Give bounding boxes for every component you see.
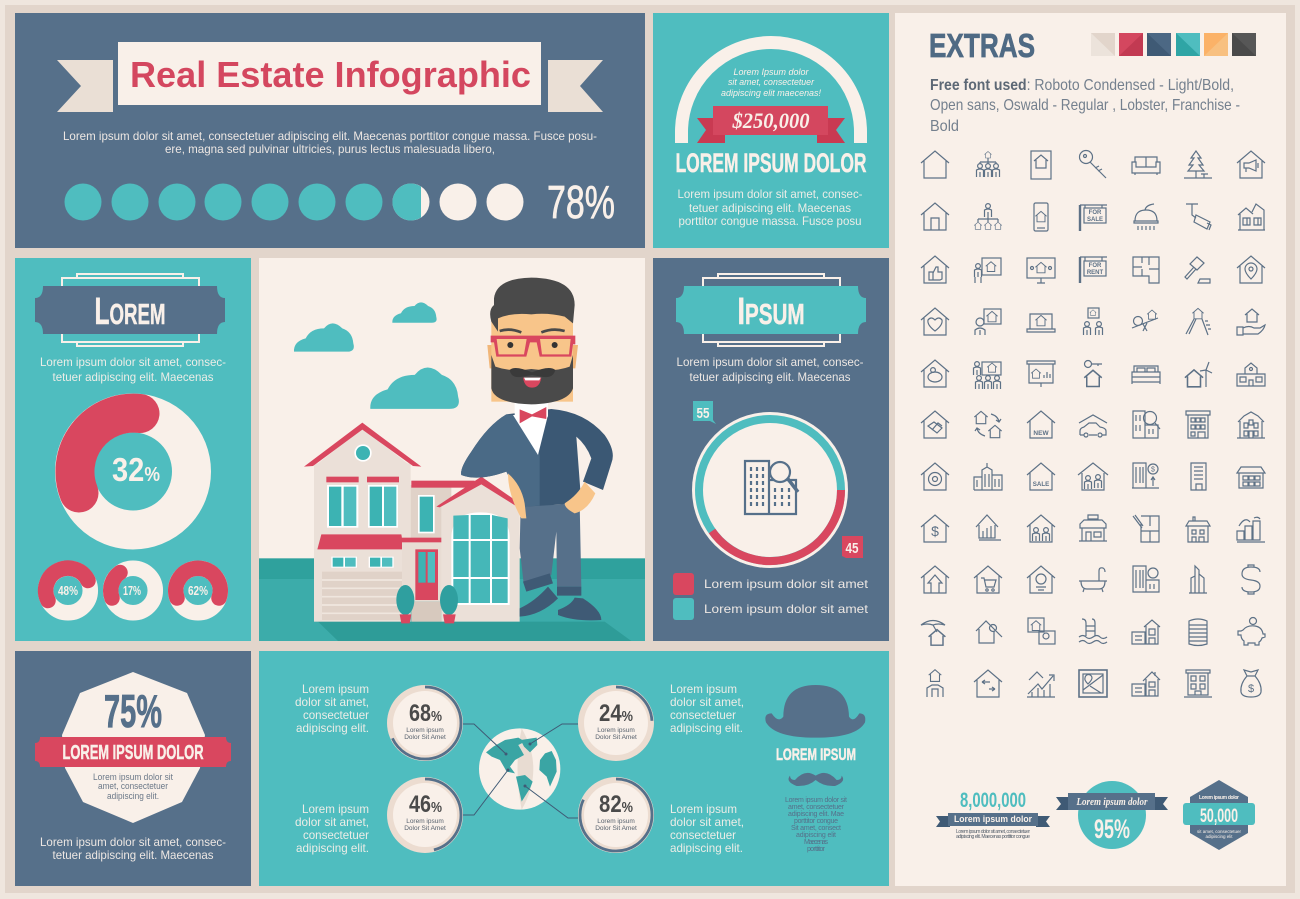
text: tetuer adipiscing elit. Maecenas bbox=[690, 370, 850, 384]
icon: city bbox=[974, 463, 1002, 490]
colour swatches bbox=[1091, 33, 1256, 56]
price ribbon bbox=[697, 106, 845, 143]
glasses bbox=[491, 336, 575, 357]
icon: house bbox=[921, 151, 949, 178]
icon: couple in house bbox=[1027, 515, 1055, 542]
icon: house megaphone bbox=[1237, 151, 1265, 178]
icon: for sale sign: FOR bbox=[1089, 210, 1102, 216]
icon: couple house bbox=[1084, 308, 1102, 335]
icon: house piggy bbox=[921, 360, 949, 387]
icon: key house bbox=[1084, 360, 1102, 386]
icon: house handshake bbox=[921, 411, 949, 438]
icon grid bbox=[921, 150, 1265, 697]
icon: round tower bbox=[1189, 619, 1207, 646]
icon: laptop bbox=[1027, 314, 1055, 332]
icon: shop bbox=[1079, 515, 1107, 541]
tag 55 bbox=[693, 401, 716, 424]
icon: house dollar bbox=[921, 515, 949, 542]
stat circle 68: Lorem ipsum bbox=[406, 727, 444, 734]
text top right: dolor sit amet, bbox=[670, 695, 744, 709]
icon: house chart bbox=[976, 515, 1001, 540]
percent 78: 78% bbox=[547, 176, 615, 228]
icon: family house bbox=[1078, 463, 1108, 490]
icon: property growth chart bbox=[1237, 517, 1265, 542]
icon: bathtub bbox=[1079, 568, 1107, 592]
hat text: porttitor bbox=[807, 846, 826, 853]
stat circle 68: Dolor Sit Amet bbox=[404, 734, 446, 741]
badge ribbon label: Lorem ipsum dolor bbox=[1076, 796, 1148, 808]
legend bbox=[673, 573, 869, 620]
price text: porttitor congue massa. Fusce posu bbox=[678, 214, 862, 228]
icon: house insurance umbrella bbox=[921, 620, 945, 645]
title: Real Estate Infographic bbox=[130, 54, 531, 95]
text bottom left: consectetuer bbox=[303, 828, 369, 842]
intro text: Lorem ipsum dolor sit amet, consectetuer adipiscing elit. Maecenas porttitor congue massa. Fusce posu- bbox=[63, 129, 597, 143]
icon: building value up: $ bbox=[1151, 466, 1155, 474]
text: Lorem ipsum dolor sit amet, consec- bbox=[40, 355, 226, 369]
icon: dollar bbox=[1242, 565, 1260, 594]
stat circle 46: Lorem ipsum bbox=[406, 818, 444, 825]
icon: building search bbox=[745, 461, 798, 514]
icon: for rent sign: FOR bbox=[1089, 263, 1102, 269]
hair bbox=[490, 278, 575, 332]
badge: 95% bbox=[1056, 781, 1168, 849]
text bbox=[676, 355, 864, 384]
arch caption: sit amet, consectetuer bbox=[728, 77, 815, 88]
text top left: consectetuer bbox=[303, 708, 369, 722]
icon: chat house money bbox=[1028, 618, 1055, 644]
tag 45 bbox=[842, 536, 863, 558]
small donut 48 bbox=[46, 568, 90, 613]
stat circle 82 bbox=[578, 777, 654, 853]
moustache bbox=[510, 368, 555, 377]
badge text: adipiscing elit. bbox=[107, 791, 159, 801]
badge caption bbox=[956, 829, 1030, 840]
badge: 50,000 bbox=[1183, 780, 1255, 850]
icon: playground bbox=[1186, 308, 1211, 335]
big donut chart bbox=[74, 413, 192, 530]
stat circle 68 bbox=[387, 685, 463, 761]
icon: building dollar bbox=[1133, 566, 1159, 592]
badge ribbon bbox=[1056, 797, 1168, 810]
icon: house dollar: $ bbox=[931, 523, 939, 539]
badge caption: Lorem ipsum dolor sit amet, consectetuer bbox=[956, 829, 1030, 835]
small donut 17: 17% bbox=[123, 583, 141, 598]
text bottom left: dolor sit amet, bbox=[295, 815, 369, 829]
stat circle 24: 24% bbox=[599, 700, 633, 727]
donut value: 32% bbox=[112, 451, 160, 488]
hat text: Lorem ipsum dolor sit bbox=[785, 797, 847, 804]
icon: for rent sign bbox=[1080, 257, 1107, 283]
text bottom right: adipiscing elit. bbox=[670, 841, 743, 855]
bow tie bbox=[520, 407, 546, 423]
polygon badge bbox=[62, 672, 205, 823]
icon: floor plan bbox=[1133, 257, 1159, 283]
price text bbox=[678, 187, 863, 228]
text bottom left: adipiscing elit. bbox=[296, 841, 369, 855]
panel: price bbox=[653, 13, 889, 248]
text bottom left bbox=[295, 802, 369, 855]
icon: house document bbox=[1027, 566, 1055, 593]
badge: 8,000,000 bbox=[936, 789, 1050, 840]
plaque label: LOREM IPSUM DOLOR bbox=[62, 742, 204, 764]
icon: house heart bbox=[921, 308, 949, 335]
text bottom right: Lorem ipsum bbox=[670, 802, 737, 816]
legend: Lorem ipsum dolor sit amet bbox=[704, 602, 869, 616]
icon: office block bbox=[1184, 670, 1212, 697]
text: tetuer adipiscing elit. Maecenas bbox=[52, 370, 214, 384]
badge caption bottom: sit amet, consectetuer bbox=[1197, 829, 1242, 834]
panel: title banner bbox=[15, 13, 645, 248]
icon: big house bbox=[1238, 204, 1265, 230]
panel: extras bbox=[895, 13, 1286, 886]
icon: pool bbox=[1079, 619, 1107, 644]
mouth bbox=[523, 378, 541, 388]
text bottom right: consectetuer bbox=[670, 828, 736, 842]
heading plaque bbox=[35, 274, 225, 346]
badge ribbon label: Lorem ipsum dolor bbox=[954, 814, 1032, 824]
red plaque bbox=[35, 737, 231, 767]
fonts note: Bold bbox=[930, 118, 959, 135]
icon: house exchange bbox=[974, 411, 1002, 438]
text bottom right: dolor sit amet, bbox=[670, 815, 744, 829]
icon: tower bbox=[1191, 463, 1206, 490]
extras heading: EXTRAS bbox=[929, 27, 1035, 64]
stat circle 46 bbox=[387, 777, 463, 853]
icon: monitor bbox=[1027, 258, 1055, 283]
text top right: adipiscing elit. bbox=[670, 721, 743, 735]
arch caption: adipiscing elit maecenas! bbox=[721, 88, 821, 99]
stat circle 24: Lorem ipsum bbox=[597, 727, 635, 734]
icon: house up arrow bbox=[921, 566, 949, 593]
hat text: Maecenas bbox=[804, 839, 828, 846]
stat circle 68: 68% bbox=[409, 700, 442, 727]
globe bbox=[479, 728, 560, 810]
icon: new house: NEW bbox=[1033, 430, 1049, 437]
icon: apartment block bbox=[1186, 411, 1210, 438]
heading: IPSUM bbox=[738, 291, 804, 333]
connector lines bbox=[463, 724, 578, 818]
badge text: Lorem ipsum dolor sit bbox=[93, 772, 173, 782]
small donut 62: 62% bbox=[188, 583, 208, 598]
small donut 62 bbox=[176, 568, 220, 613]
badge caption bottom: adipiscing elit bbox=[1205, 834, 1233, 839]
icon: house thumb bbox=[921, 256, 949, 283]
icon: balance money house bbox=[1132, 310, 1158, 331]
icon: sale house bbox=[1027, 463, 1055, 490]
text: Lorem ipsum dolor sit amet, consec- bbox=[676, 355, 864, 369]
icon: family home bbox=[1186, 517, 1210, 542]
icon: house door bbox=[921, 203, 949, 230]
small donut 48: 48% bbox=[58, 583, 78, 598]
small donut 17 bbox=[111, 568, 155, 613]
icon: shower bbox=[1134, 204, 1158, 230]
icon: manager network bbox=[974, 204, 1002, 229]
icon: map pin bbox=[1079, 670, 1107, 697]
badge caption: adipiscing elit. Maecenas porttitor congue bbox=[956, 834, 1030, 840]
hat bbox=[765, 685, 865, 738]
hat text: amet, consectetuer bbox=[788, 804, 845, 811]
icon: key bbox=[1080, 150, 1106, 178]
icon: house transfer bbox=[974, 670, 1002, 697]
badge text bbox=[93, 772, 173, 801]
icon: garage home bbox=[1132, 672, 1160, 696]
text bbox=[40, 355, 226, 384]
icon: phone bbox=[1034, 203, 1048, 231]
moustache bbox=[788, 773, 843, 786]
badge figure: 95% bbox=[1094, 814, 1130, 844]
shirt and neck bbox=[513, 398, 548, 455]
icon: team hierarchy bbox=[976, 152, 1000, 177]
stat circle 82: Dolor Sit Amet bbox=[595, 825, 637, 832]
panel: lorem donuts bbox=[15, 258, 251, 641]
bushes bbox=[396, 585, 458, 623]
icon: school bbox=[1237, 363, 1265, 386]
text bbox=[40, 835, 226, 862]
icon: piggy bank bbox=[1238, 618, 1265, 645]
icon: seminar bbox=[974, 362, 1001, 389]
value: 75% bbox=[104, 685, 162, 737]
tag 55: 55 bbox=[696, 405, 710, 422]
stat circle 24: Dolor Sit Amet bbox=[595, 734, 637, 741]
icon: house pin bbox=[1237, 256, 1265, 283]
icon: house growth bbox=[1027, 672, 1055, 697]
arch caption bbox=[721, 67, 821, 99]
icon: wind house bbox=[1185, 362, 1212, 387]
icon: bed bbox=[1132, 366, 1160, 384]
fonts note: Free font used: Roboto Condensed - Light/Bold, bbox=[930, 77, 1234, 94]
hat text: Sit amet, consect bbox=[791, 825, 841, 832]
badge ribbon bbox=[936, 816, 1050, 827]
icon: money bag bbox=[1241, 670, 1261, 697]
stat circle 82: Lorem ipsum bbox=[597, 818, 635, 825]
intro text bbox=[63, 129, 597, 156]
icon: mansion bbox=[1237, 412, 1265, 438]
stat circle 24 bbox=[578, 685, 654, 761]
icon: building search bbox=[1133, 411, 1160, 438]
hat text bbox=[785, 797, 847, 853]
icon: house cart bbox=[974, 566, 1002, 593]
legs bbox=[520, 503, 581, 587]
panel: illustration bbox=[259, 258, 645, 641]
stat circle 46: 46% bbox=[409, 791, 442, 818]
text top left: adipiscing elit. bbox=[296, 721, 369, 735]
house bbox=[304, 423, 525, 622]
text bottom right bbox=[670, 802, 744, 855]
arch caption: Lorem Ipsum dolor bbox=[734, 67, 809, 78]
icon: flat house bbox=[1237, 467, 1265, 488]
icon: house person bbox=[927, 670, 943, 697]
progress dots bbox=[64, 184, 524, 220]
arch bbox=[682, 42, 860, 143]
clouds bbox=[294, 302, 459, 409]
icon: house settings bbox=[921, 463, 949, 490]
price heading: LOREM IPSUM DOLOR bbox=[676, 148, 866, 178]
icon: camera bbox=[1186, 204, 1211, 230]
stat circle 46: Dolor Sit Amet bbox=[404, 825, 446, 832]
text top left: Lorem ipsum bbox=[302, 682, 369, 696]
ground bbox=[259, 558, 645, 641]
icon: house search bbox=[976, 621, 1002, 643]
text top left bbox=[295, 682, 369, 735]
text top right bbox=[670, 682, 744, 735]
ribbon tails bbox=[57, 60, 603, 112]
stat circle 82: 82% bbox=[599, 791, 633, 818]
jacket bbox=[461, 409, 613, 507]
icon: tablet bbox=[1031, 151, 1051, 179]
ring chart bbox=[692, 412, 848, 568]
hat label: LOREM IPSUM bbox=[776, 745, 856, 764]
text top right: consectetuer bbox=[670, 708, 736, 722]
shoes bbox=[520, 587, 601, 620]
text: Lorem ipsum dolor sit amet, consec- bbox=[40, 835, 226, 849]
icon: new house bbox=[1027, 411, 1055, 438]
hat text: adipiscing elit bbox=[796, 832, 836, 839]
icon: gavel bbox=[1185, 257, 1210, 283]
icon: skyscraper bbox=[1189, 566, 1207, 593]
badge caption top: Lorem ipsum dolor bbox=[1199, 795, 1239, 801]
icon: carport bbox=[1079, 415, 1107, 437]
fonts note: Open sans, Oswald - Regular , Lobster, Franchise - bbox=[930, 97, 1240, 114]
icon: building value up bbox=[1132, 463, 1159, 488]
beard bbox=[491, 355, 573, 404]
icon: presenter board bbox=[974, 258, 1001, 283]
price text: tetuer adipiscing elit. Maecenas bbox=[689, 201, 851, 215]
fonts note bbox=[930, 77, 1240, 135]
panel: 75 percent bbox=[15, 651, 251, 886]
icon: blueprint pencil bbox=[1133, 515, 1159, 542]
icon: sofa bbox=[1132, 157, 1160, 175]
icon: for rent sign: RENT bbox=[1087, 270, 1103, 276]
icon: agent house board bbox=[975, 309, 1001, 335]
price text: Lorem ipsum dolor sit amet, consec- bbox=[678, 187, 863, 201]
businessman bbox=[461, 278, 613, 620]
head bbox=[487, 345, 578, 368]
intro text: ere, magna sed pulvinar ultricies, purus lectus malesuada libero, bbox=[165, 142, 495, 156]
badge caption bottom bbox=[1197, 829, 1242, 839]
panel: global stats bbox=[259, 651, 889, 886]
legend: Lorem ipsum dolor sit amet bbox=[704, 577, 869, 591]
price: $250,000 bbox=[732, 108, 810, 133]
heading: LOREM bbox=[94, 291, 166, 333]
text bottom left: Lorem ipsum bbox=[302, 802, 369, 816]
icon: projector screen bbox=[1027, 361, 1055, 387]
title ribbon bbox=[118, 42, 541, 105]
heading plaque bbox=[676, 274, 866, 346]
icon: for sale sign bbox=[1080, 205, 1107, 231]
text top left: dolor sit amet, bbox=[295, 695, 369, 709]
hands bbox=[508, 473, 595, 518]
badge text: amet, consectetuer bbox=[98, 781, 168, 791]
icon: for sale sign: SALE bbox=[1087, 217, 1103, 223]
icon: garage house bbox=[1132, 620, 1160, 644]
text top right: Lorem ipsum bbox=[670, 682, 737, 696]
icon: money bag: $ bbox=[1248, 683, 1254, 695]
hat text: adipiscing elit. Mae bbox=[788, 811, 844, 818]
panel: ipsum ring bbox=[653, 258, 889, 641]
eyebrows and eyes bbox=[500, 330, 565, 332]
badge figure: 50,000 bbox=[1200, 806, 1238, 827]
icon: sale house: SALE bbox=[1033, 481, 1049, 488]
badge figure: 8,000,000 bbox=[960, 789, 1026, 812]
tag 45: 45 bbox=[846, 540, 858, 557]
hat text: porttitor congue bbox=[794, 818, 838, 825]
icon: tree bbox=[1184, 151, 1212, 178]
text: tetuer adipiscing elit. Maecenas bbox=[52, 848, 214, 862]
icon: hand house bbox=[1237, 309, 1265, 335]
